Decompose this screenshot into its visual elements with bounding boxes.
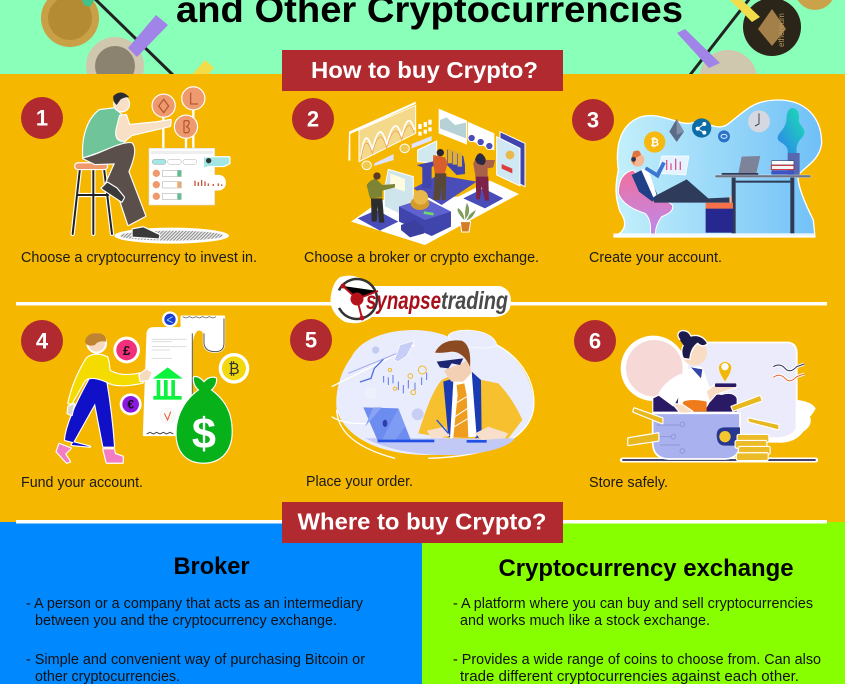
step 3 illustration: relaxing at desk: ₿: [650, 137, 659, 149]
orange steps panel: [0, 74, 845, 523]
heading banner: how to buy: [282, 50, 563, 91]
exchange point one: - A platform where you can buy and sell cryptocurrencies: [453, 596, 813, 612]
step 1 number: [21, 97, 63, 139]
heading banner: where to buy: [282, 502, 563, 543]
step 2 caption: Choose a broker or crypto exchange.: [304, 250, 539, 266]
exchange point two: - Provides a wide range of coins to choose from. Can also: [453, 652, 821, 668]
step 6 illustration: woman in crypto wallet: [621, 331, 816, 460]
synapsetrading logo: trading: [441, 287, 508, 315]
step 5 number: 5: [305, 328, 317, 352]
header decoration: right coins and clothesline: [677, 0, 835, 108]
step 1 caption: Choose a cryptocurrency to invest in.: [21, 250, 257, 266]
divider: [16, 302, 827, 306]
step 4 illustration: funding with receipt and money bag: $: [192, 410, 216, 458]
step 3 number: [572, 99, 614, 141]
step 6 number: [574, 320, 616, 362]
header decoration: left coins and clothesline: [41, 0, 214, 95]
exchange point one: and works much like a stock exchange.: [460, 613, 710, 629]
panel: cryptocurrency exchange: [422, 522, 845, 684]
step 4 number: [21, 320, 63, 362]
step 1 number: 1: [36, 106, 48, 130]
panel: broker: [0, 522, 422, 684]
heading banner: where to buy: Where to buy Crypto?: [298, 508, 546, 534]
step 4 illustration: funding with receipt and money bag: €: [127, 398, 134, 412]
step 3 number: 3: [587, 108, 599, 132]
step 5 number: [290, 319, 332, 361]
broker heading: Broker: [174, 553, 250, 580]
step 2 number: 2: [307, 106, 319, 132]
step 4 illustration: funding with receipt and money bag: ₿: [228, 361, 240, 378]
broker point one: between you and the cryptocurrency exchange.: [35, 613, 337, 629]
step 6 number: 6: [589, 328, 601, 354]
step 4 number: 4: [36, 328, 49, 354]
header decoration: right coins and clothesline: ethereum: [777, 13, 786, 47]
step 6 caption: Store safely.: [589, 475, 668, 491]
header background: [0, 0, 845, 75]
step 2 illustration: isometric exchange: [348, 102, 525, 245]
step 3 caption: Create your account.: [589, 250, 722, 266]
step 5 illustration: trader at laptop: [332, 330, 534, 458]
synapsetrading logo: [330, 272, 511, 326]
divider above panels: [16, 520, 827, 524]
step 3 illustration: relaxing at desk: [613, 100, 822, 238]
exchange heading: Cryptocurrency exchange: [498, 555, 794, 582]
broker point one: - A person or a company that acts as an intermediary: [26, 596, 364, 612]
step 4 illustration: funding with receipt and money bag: £: [123, 343, 131, 358]
synapsetrading logo: synapse: [366, 287, 441, 315]
broker point two: - Simple and convenient way of purchasing Bitcoin or: [26, 652, 365, 668]
step 4 illustration: funding with receipt and money bag: [57, 311, 249, 463]
step 1 illustration: man choosing coin: [73, 87, 229, 244]
step 5 caption: Place your order.: [306, 474, 413, 490]
step 4 caption: Fund your account.: [21, 475, 143, 491]
step 2 number: [292, 98, 334, 140]
heading banner: how to buy: How to buy Crypto?: [311, 57, 538, 83]
